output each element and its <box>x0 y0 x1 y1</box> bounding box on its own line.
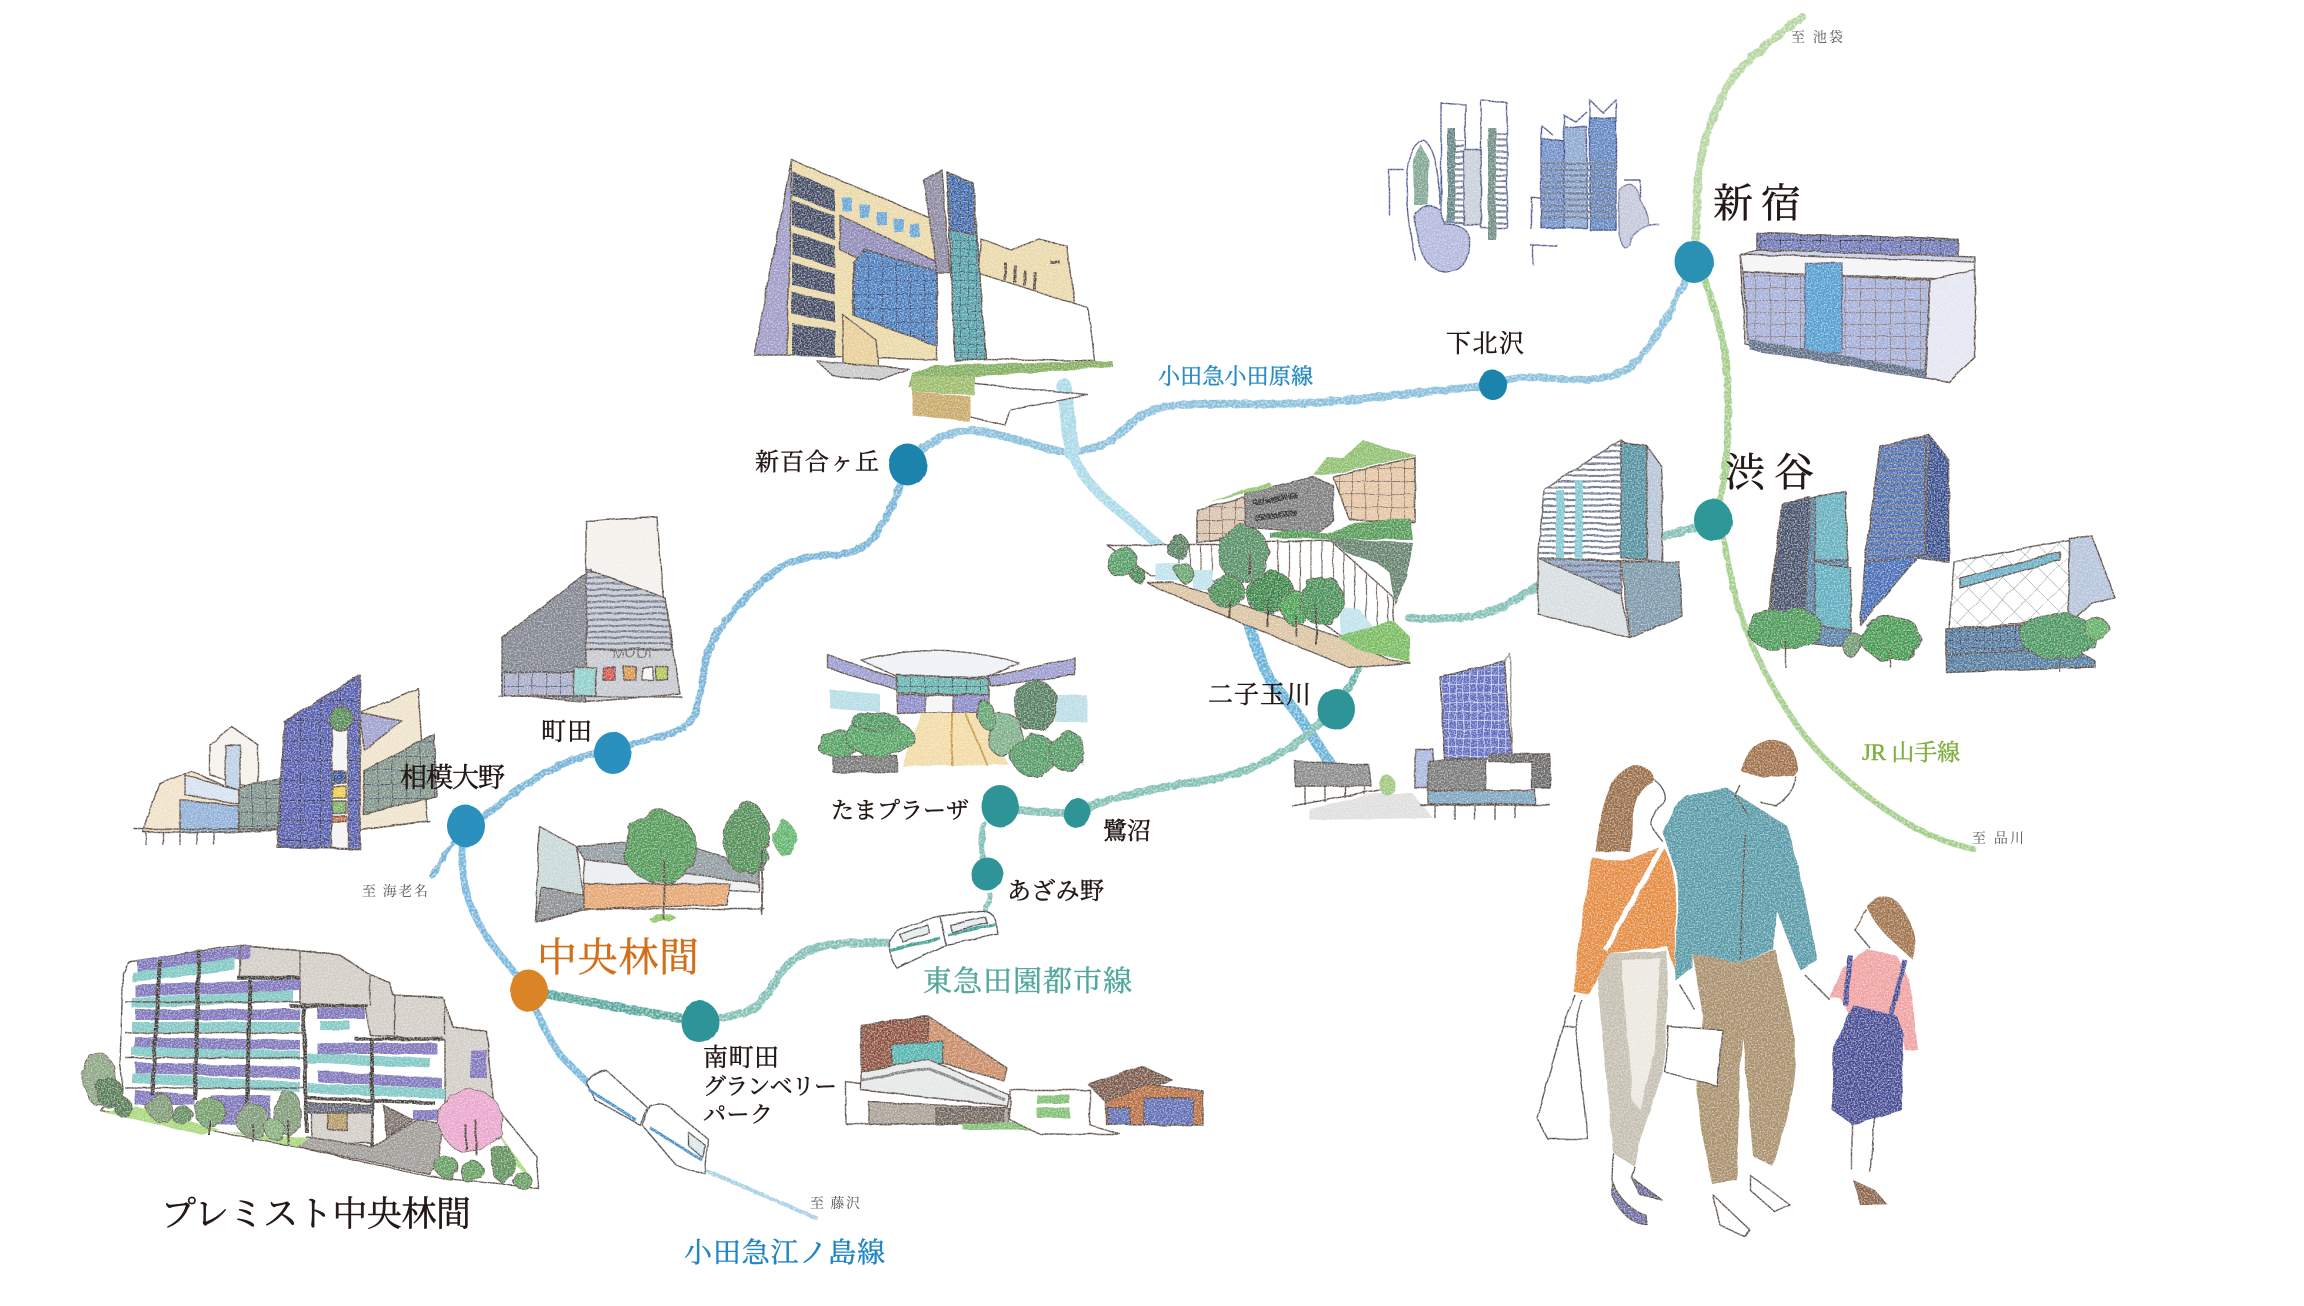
illustration: Tama-Plaza station <box>816 651 1087 776</box>
label: Shimokitazawa: 下北沢 <box>1446 330 1524 358</box>
label: Shin-Yurigaoka: 新百合ヶ丘 <box>755 449 879 476</box>
label: Sagami-Ono: 相模大野 <box>400 763 505 793</box>
illustration: Premist Chuo-Rinkan residence <box>84 945 538 1188</box>
illustration: Odakyu Enoshima train <box>587 1070 708 1173</box>
label: to Ebina: 至 海老名 <box>362 883 428 900</box>
label: Premist Chuo-Rinkan: プレミスト中央林間 <box>161 1195 471 1234</box>
label: Minami-Machida Grandberry Park <box>703 1044 837 1127</box>
illustration: Shin-Yurigaoka station buildings <box>754 160 1113 425</box>
label: Saginuma: 鷺沼 <box>1103 818 1151 845</box>
label: to Shinagawa: 至 品川 <box>1972 831 2024 847</box>
illustration: Futako terrace building with trees <box>1107 440 1417 668</box>
illustration: Minami-Machida Grandberry Park <box>846 1016 1203 1134</box>
line: JR Yamanote <box>1696 17 1973 849</box>
illustration: Sagami-Ono station building <box>134 675 437 849</box>
illustration: Shinjuku skyscrapers <box>1389 100 1660 272</box>
line: Odakyu Odawara <box>432 262 1694 876</box>
label: Odakyu Odawara Line: 小田急小田原線 <box>1158 364 1313 389</box>
labels <box>161 29 2024 1269</box>
illustration: Machida MODI building <box>498 517 682 702</box>
illustration: Tokyu Den-en-toshi train <box>889 911 998 968</box>
figure: man <box>1663 740 1830 1237</box>
label: Shibuya: 渋谷 <box>1725 450 1814 495</box>
illustration: walking family <box>1537 740 1918 1237</box>
node: Chuo-Rinkan <box>510 970 548 1012</box>
figure: woman <box>1537 765 1676 1225</box>
node: Tama-Plaza <box>981 785 1019 827</box>
node: Azamino <box>971 857 1003 891</box>
illustration: Shibuya skyscrapers with trees <box>1747 435 2115 672</box>
node: Minami-Machida <box>681 1001 719 1043</box>
line: Tokyu Den-en-toshi <box>529 527 1696 1022</box>
label: Odakyu Enoshima Line: 小田急江ノ島線 <box>684 1237 885 1269</box>
line: Tama branch <box>1064 386 1330 763</box>
figure: child <box>1815 897 1918 1205</box>
label: Machida: 町田 <box>541 719 592 746</box>
label: Minami-Machida Grandberry Park: パーク <box>703 1102 773 1127</box>
illustration: Machida MODI building: MODI <box>612 645 652 662</box>
node: Saginuma <box>1063 798 1091 828</box>
node: Shibuya <box>1694 499 1732 541</box>
railway lines <box>432 17 1973 1218</box>
node: Shinjuku <box>1675 241 1713 283</box>
label: Futako-Tamagawa: 二子玉川 <box>1208 682 1311 709</box>
line: Odakyu Enoshima <box>462 826 816 1218</box>
label: Minami-Machida Grandberry Park: 南町田 <box>703 1044 779 1072</box>
node: Futako-Tamagawa <box>1317 688 1355 730</box>
illustration: Futako-Tamagawa towers <box>1292 654 1550 820</box>
node: Sagami-Ono <box>447 805 485 847</box>
label: Azamino: あざみ野 <box>1007 878 1104 905</box>
label: Tokyu Den-en-toshi Line: 東急田園都市線 <box>923 965 1132 998</box>
illustration: Chuo-Rinkan station <box>536 802 795 924</box>
node: Machida <box>594 732 632 774</box>
illustration: office tower beside Shibuya <box>1538 440 1682 638</box>
node: Shimokitazawa <box>1479 370 1507 400</box>
label: JR Yamanote Line: JR 山手線 <box>1862 740 1960 765</box>
label: Shinjuku: 新宿 <box>1713 181 1801 226</box>
illustration: Shinjuku station building <box>1740 233 1975 382</box>
node: Shin-Yurigaoka <box>889 444 927 486</box>
label: Minami-Machida Grandberry Park: グランベリー <box>703 1074 837 1099</box>
station nodes <box>447 241 1732 1043</box>
label: Chuo-Rinkan: 中央林間 <box>537 935 699 980</box>
label: Tama-Plaza: たまプラーザ <box>831 798 969 823</box>
label: to Ikebukuro: 至 池袋 <box>1791 29 1843 46</box>
label: to Fujisawa: 至 藤沢 <box>810 1195 860 1212</box>
